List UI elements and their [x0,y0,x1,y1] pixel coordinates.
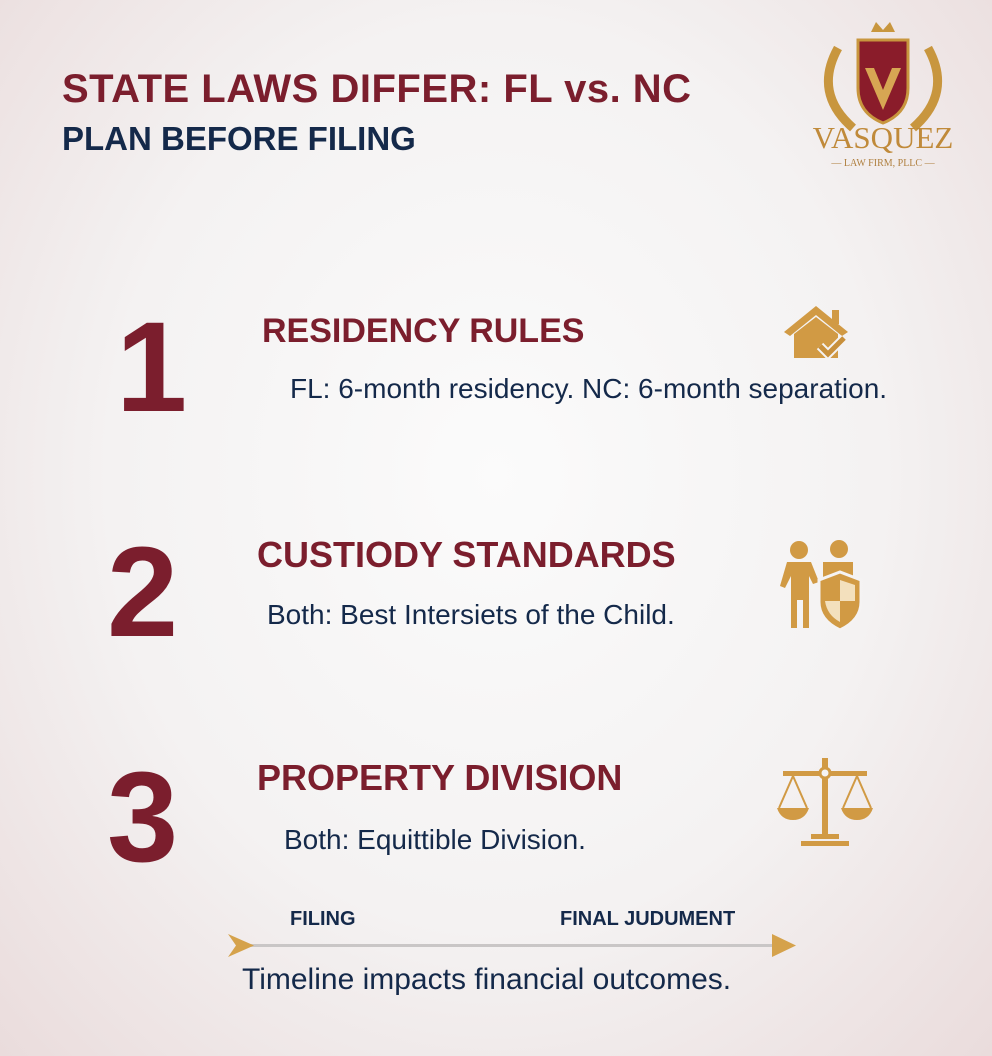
subtitle: PLAN BEFORE FILING [62,120,416,157]
item 1 [116,296,887,439]
number 3: 3 [107,746,178,889]
heading residency: RESIDENCY RULES [262,312,584,350]
text property: Both: Equittible Division. [284,824,586,855]
text custody: Both: Best Intersiets of the Child. [267,599,675,630]
icon: scales [777,758,873,846]
item 3 [107,746,873,889]
number 2: 2 [107,521,178,664]
heading property: PROPERTY DIVISION [257,757,622,798]
icon: family shield [780,540,860,628]
logo: — LAW FIRM, PLLC — [830,158,936,169]
label filing: FILING [290,908,356,930]
text residency: FL: 6-month residency. NC: 6-month separation. [290,373,887,404]
label final judgment: FINAL JUDUMENT [560,908,735,930]
number 1: 1 [116,296,187,439]
item 2 [107,521,860,664]
logo: VASQUEZ [813,120,953,155]
icon: house [784,306,848,358]
arrow [228,934,796,957]
logo [812,22,953,169]
timeline [228,908,796,957]
title: STATE LAWS DIFFER: FL vs. NC [62,67,692,111]
caption: Timeline impacts financial outcomes. [242,963,731,996]
heading custody: CUSTIODY STANDARDS [257,534,676,575]
